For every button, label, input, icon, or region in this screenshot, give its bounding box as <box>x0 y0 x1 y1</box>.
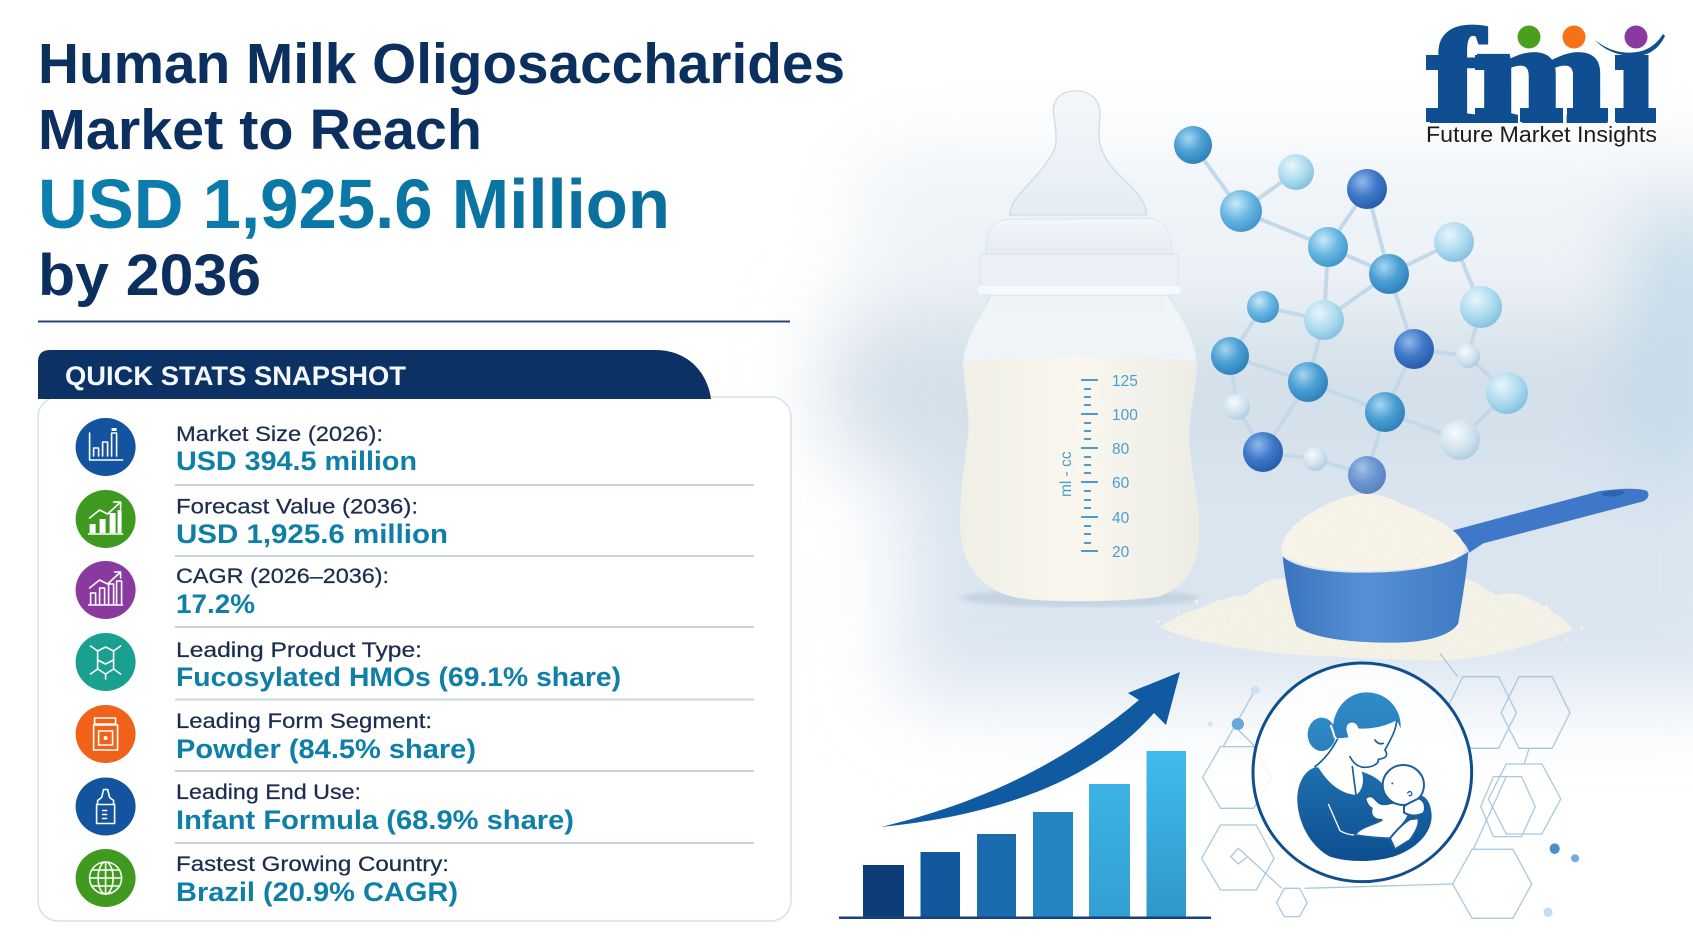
icon: globe <box>76 849 136 907</box>
stat: fastest growing country: Fastest Growing Country: <box>176 853 449 876</box>
measurement scale: 20 <box>1112 544 1130 561</box>
measurement scale: 40 <box>1112 510 1130 527</box>
mother hair <box>1308 692 1401 751</box>
molecule structure <box>1174 126 1528 494</box>
stat: CAGR: CAGR (2026–2036): <box>176 565 389 588</box>
scoop cup <box>1283 552 1468 643</box>
measurement scale: 80 <box>1112 441 1130 458</box>
powder pile <box>1157 578 1591 660</box>
stat: forecast value: USD 1,925.6 million <box>176 519 448 549</box>
title: USD 1,925.6 Million <box>38 165 670 243</box>
stat: leading end use: Infant Formula (68.9% share) <box>176 805 574 835</box>
measurement scale <box>1058 373 1138 561</box>
panel: quick stats snapshot <box>38 350 791 921</box>
bottle body <box>960 296 1199 601</box>
scoop handle <box>1448 489 1648 553</box>
fmi logo: Future Market Insights <box>1426 122 1657 147</box>
mother hands <box>1390 798 1425 849</box>
icon: growth chart <box>76 490 136 548</box>
stat: forecast value <box>76 490 448 549</box>
stat: leading end use: Leading End Use: <box>176 781 361 804</box>
scoop powder mound <box>1282 494 1465 572</box>
stat: leading form segment: Powder (84.5% share) <box>176 734 476 764</box>
stat: leading form segment <box>76 705 476 764</box>
mother face line <box>1315 721 1397 795</box>
title <box>38 32 845 308</box>
baby bottle <box>960 91 1200 607</box>
icon: molecule <box>76 633 136 691</box>
stat: forecast value: Forecast Value (2036): <box>176 496 418 518</box>
title: Human Milk Oligosaccharides <box>38 32 845 96</box>
mother and baby emblem <box>1253 663 1472 882</box>
stat: leading product type: Leading Product Type: <box>176 639 422 662</box>
stat: leading form segment: Leading Form Segment: <box>176 710 432 733</box>
mother body <box>1297 767 1432 861</box>
icon: baby bottle <box>76 778 136 836</box>
stat: leading product type <box>76 633 621 692</box>
stat: leading product type: Fucosylated HMOs (69.1% share) <box>176 662 621 692</box>
baby <box>1355 765 1424 838</box>
stat: CAGR: 17.2% <box>176 589 255 619</box>
title: Market to Reach <box>38 98 482 162</box>
stat: fastest growing country <box>76 849 458 907</box>
bottle nipple and collar <box>977 91 1182 313</box>
milk <box>960 357 1199 601</box>
growth arrow <box>881 672 1180 827</box>
stat: fastest growing country: Brazil (20.9% CAGR) <box>176 877 458 907</box>
measurement scale: 60 <box>1112 475 1130 492</box>
title: by 2036 <box>38 243 261 308</box>
icon: line and bars <box>76 561 136 619</box>
measurement scale: 100 <box>1112 407 1138 424</box>
stat: market size <box>76 418 417 476</box>
measurement scale: 125 <box>1112 373 1138 390</box>
hexagon network <box>1202 653 1579 918</box>
icon: powder jar <box>76 705 136 763</box>
stat: leading end use <box>76 778 574 836</box>
panel header: QUICK STATS SNAPSHOT <box>65 361 407 391</box>
growth bar chart <box>839 751 1211 919</box>
stat: CAGR <box>76 561 389 619</box>
stat: market size: USD 394.5 million <box>176 446 417 476</box>
fmi logo: f <box>1428 2 1486 150</box>
measurement scale: ml - cc <box>1058 451 1075 497</box>
panel header <box>38 350 711 399</box>
stat: market size: Market Size (2026): <box>176 423 383 446</box>
icon: bar chart <box>76 418 136 476</box>
fmi logo <box>1426 24 1665 146</box>
measuring scoop <box>1282 489 1648 643</box>
